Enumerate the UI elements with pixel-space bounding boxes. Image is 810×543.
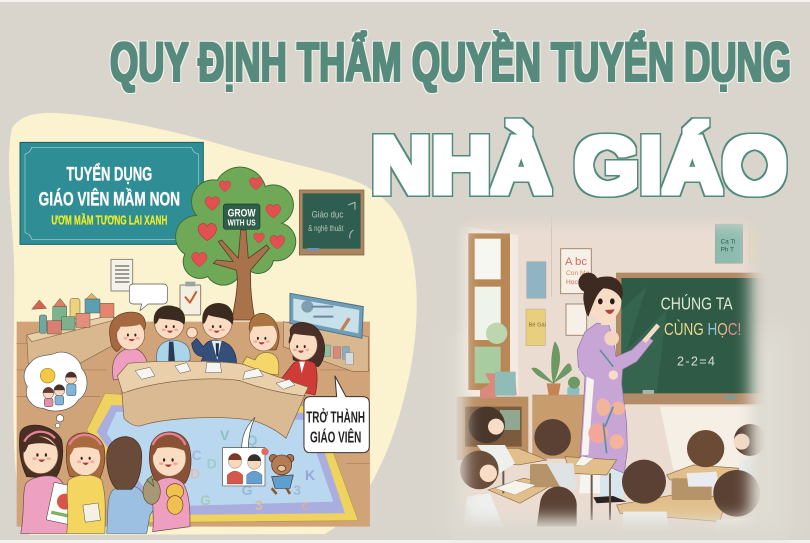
person: woman in red xyxy=(282,322,325,395)
chalkboard: & nghệ thuật xyxy=(308,223,344,233)
woman seen from behind in blue xyxy=(107,437,157,533)
chalkboard xyxy=(616,273,769,470)
window xyxy=(464,228,518,396)
chalkboard: Giáo dục xyxy=(312,209,344,219)
rug letters: K xyxy=(305,467,315,483)
photo card with children xyxy=(223,417,269,486)
teddy bear xyxy=(269,454,294,494)
toy blocks xyxy=(32,293,114,334)
children xyxy=(43,372,77,407)
speech bubble empty xyxy=(129,284,167,311)
wall posters xyxy=(526,223,763,346)
rug xyxy=(87,393,358,523)
rug letters: V xyxy=(220,427,230,443)
wall poster xyxy=(111,259,133,291)
sun xyxy=(40,368,55,383)
woman holding toys xyxy=(143,432,191,532)
wall posters: A bc xyxy=(565,256,587,268)
heads and bodies xyxy=(460,406,762,526)
teal recruitment board xyxy=(20,142,203,244)
teacher in ao dai xyxy=(577,273,658,503)
teal recruitment board: TUYỂN DỤNG xyxy=(66,163,152,186)
desks xyxy=(488,448,740,522)
wall posters: Bé Gái xyxy=(529,323,546,329)
hearts xyxy=(192,177,285,267)
heading: teachers: NHÀ GIÁO xyxy=(371,120,787,210)
teal recruitment board: GIÁO VIÊN MẦM NON xyxy=(39,187,180,211)
cream blob panel xyxy=(9,113,417,535)
chalkboard: 2-2=4 xyxy=(677,354,715,368)
wall posters: Ph T xyxy=(721,246,734,253)
teal recruitment board: ƯƠM MẦM TƯƠNG LAI XANH xyxy=(51,212,167,227)
rug letters: D xyxy=(190,465,200,481)
person: man in navy suit xyxy=(187,303,237,365)
rug letters: Q xyxy=(247,432,258,448)
speech bubble: become teacher: TRỞ THÀNH xyxy=(306,409,365,427)
speech bubble: become teacher: GIÁO VIÊN xyxy=(310,429,361,447)
chalkboard: CHÚNG TA xyxy=(661,293,733,313)
person: man in blue shirt xyxy=(154,305,190,365)
wall posters: Học xyxy=(566,279,578,286)
rug letters: C xyxy=(192,447,202,463)
panel: left illustration xyxy=(17,142,370,533)
thought bubble xyxy=(24,352,87,428)
woman in yellow xyxy=(66,433,105,533)
woman with drawing xyxy=(19,425,83,533)
wall posters: Con Mẹ xyxy=(566,270,590,277)
panel: classroom illustration xyxy=(456,220,762,526)
person: woman in pink xyxy=(110,312,149,380)
clipboard xyxy=(180,282,201,315)
grow with us sign: WITH US xyxy=(228,219,256,228)
rug letters: 3 xyxy=(293,482,301,498)
curved desk xyxy=(117,361,308,438)
chalkboard: CÙNG HỌC! xyxy=(664,319,741,339)
papers on desk xyxy=(135,363,295,389)
rug letters: G xyxy=(242,482,253,498)
shelf and display right xyxy=(283,293,368,372)
chalkboard xyxy=(299,190,364,255)
rug letters: 3 xyxy=(255,497,263,513)
person: woman in yellow xyxy=(243,313,279,375)
rug letters: D xyxy=(207,455,217,471)
tree xyxy=(175,167,296,320)
wall posters: Ca Ti xyxy=(721,238,735,245)
cabinet and plant xyxy=(457,342,584,460)
front group of women xyxy=(19,425,191,533)
rug letters: G xyxy=(200,492,211,508)
rug letters: c xyxy=(302,497,310,513)
speech bubble: become teacher xyxy=(304,376,369,453)
toy shelf left xyxy=(27,293,117,365)
wooden floor xyxy=(17,322,370,527)
grow with us sign: GROW xyxy=(228,208,256,220)
grow with us sign xyxy=(223,204,260,229)
plush toys xyxy=(143,476,184,514)
rug letters xyxy=(190,427,315,513)
students and desks xyxy=(460,406,762,526)
drawing card xyxy=(46,482,83,526)
wall xyxy=(469,224,750,514)
